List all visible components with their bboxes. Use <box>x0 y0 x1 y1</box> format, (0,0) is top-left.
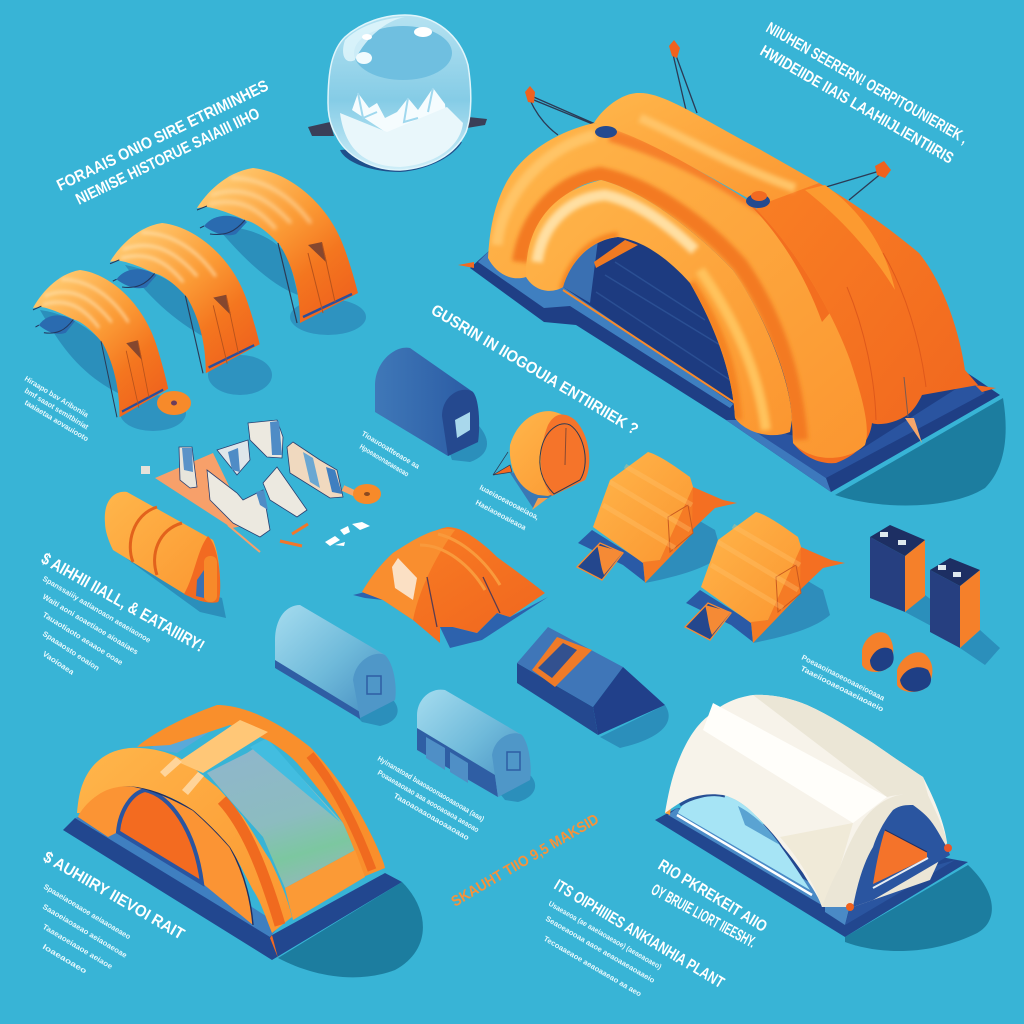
icon: light blue capsule A <box>275 605 398 726</box>
text: center heading: GUSRIN IN IIOGOUIA ENTIIRIIEK ? <box>428 302 641 439</box>
window <box>207 740 355 888</box>
tent rear body <box>755 183 978 463</box>
icon: centre orange dome tent <box>353 527 548 648</box>
arch module 2 <box>110 223 260 373</box>
front frame <box>77 748 292 933</box>
icon: navy tent with orange window <box>517 627 669 748</box>
text: cylinder heading and notes: Waiti aoni aoaetiaoe aioaaiaes <box>41 592 140 656</box>
text: upper left heading: FORAAIS ONIO SIRE ETRIMINHES <box>54 77 272 195</box>
text: left small block: taaiaetaa aovauiooto <box>23 398 91 444</box>
white inflatable tent <box>655 695 992 951</box>
text: bottom left heading and notes: Saaoeiaoaeao aeiaoaeoae <box>41 902 129 960</box>
arch module 3 <box>197 168 358 323</box>
rear ribs <box>847 253 926 420</box>
text: bottom centre heading and notes: Usaeaeoa (ae aaeiaoaeaoe) (aeaeaoaeo) <box>547 899 664 971</box>
three small orange arch modules <box>33 168 366 431</box>
icon: orange barrel pack <box>493 411 589 510</box>
text: cylinder heading and notes: Vaoioaea <box>41 649 77 677</box>
text: cylinder heading and notes: Spanssaiiiy aatianoaon aeaeiaonoe <box>41 574 152 645</box>
tent floor <box>470 200 1000 492</box>
icon: orange boxy tent A <box>577 452 737 583</box>
text: battery note: Poeaaoinaoeooaaeiooaaa <box>800 653 887 703</box>
ground shadow <box>845 865 992 951</box>
text: capsule note: Hpoeaoonaeaeaoao <box>358 442 411 479</box>
text: middle note: Poaaeaaoaao aaa aoooaoaoa aeaoao <box>376 768 481 834</box>
tent floor <box>655 808 968 937</box>
text: orange caption: SKAUHT TIIO 9,5 MAKSID <box>448 811 602 910</box>
loose parts <box>141 466 150 474</box>
icon: glass dome with mountains <box>308 15 487 172</box>
text: left small block <box>23 374 91 444</box>
kit parts <box>179 420 343 537</box>
orange valve ring <box>157 391 191 415</box>
text: lower right heading: OY BRUIE LIORT IIEESHY. <box>648 882 758 952</box>
roof strap <box>178 720 268 773</box>
orange ring <box>353 484 381 504</box>
canopy <box>665 695 947 907</box>
text: lower right heading: RIO PKREKEIT AIIO <box>655 857 770 936</box>
icon: navy capsule <box>375 348 487 462</box>
top ridge <box>594 93 819 205</box>
ground shadow <box>278 882 423 977</box>
icon: orange boxy tent B <box>685 512 845 643</box>
text: bottom left heading and notes: Spaaeiaoeaaoe aeiaaoaeaeo <box>42 882 133 941</box>
rear opening <box>150 723 223 753</box>
tent floor <box>63 818 402 960</box>
text: barrel note: Iuaeiaoeaooaeiaoa, <box>478 483 541 522</box>
icon: inflation gear kit <box>141 420 381 552</box>
rear frame <box>137 705 385 877</box>
left foot <box>665 790 673 815</box>
front panel <box>78 786 253 925</box>
tent anchors <box>525 86 535 103</box>
outer arch tube <box>488 123 867 458</box>
text: cylinder heading and notes: Tauaotiaoto aeaaoe ooae <box>41 610 125 667</box>
interior <box>563 237 735 405</box>
door <box>118 790 202 883</box>
valve knobs <box>595 126 617 138</box>
text: left small block: bmf saaot semitbiniat <box>23 386 91 432</box>
text: upper right heading: HWIDEIIDE IIAIS LAAHIIJLIENTIIRIS <box>757 43 956 168</box>
text: bottom left heading and notes: Taaeaoeiaaoe aeiaoe <box>41 922 114 971</box>
arch shadows <box>40 310 122 395</box>
inner arch tube <box>526 180 792 435</box>
text: battery note: Taaeiiooaeoaaeiaoaeio <box>799 664 886 714</box>
end face <box>822 793 947 907</box>
icon: batteries <box>870 525 1000 665</box>
door <box>873 830 927 884</box>
text: bottom centre heading and notes <box>542 877 727 999</box>
arch module 1 <box>33 270 168 417</box>
lit panel <box>805 185 895 290</box>
text: middle note: Taaoaoaaoaaoaaoaao <box>392 791 471 842</box>
big orange inflatable tent <box>458 40 1006 505</box>
ground shadow <box>835 398 1006 505</box>
text: upper left heading: NIEMISE HISTORUE SAIAIII IIHO <box>73 105 263 209</box>
icon: light blue capsule B <box>417 690 535 802</box>
text: capsule note: Tioauooatteeaoe aa <box>360 429 422 471</box>
text: cylinder heading and notes: $ AIHHII IIALL, & EATAIIIRY! <box>38 549 208 656</box>
text: cylinder heading and notes: Spaaaosto eoaion <box>41 629 102 673</box>
text: bottom centre heading and notes: Seaoeaooaa aaoe aeaoaaeaoaaeio <box>544 914 657 985</box>
text: bottom centre heading and notes: Tecoaaeaoe aeaoaaeao aa aeo <box>542 934 644 999</box>
text: left small block: Hiraapo bav Ariboniia <box>23 374 91 420</box>
window <box>678 795 810 890</box>
text: upper right heading <box>757 20 971 168</box>
guy lines <box>529 50 883 200</box>
icon: orange shoes <box>862 632 932 692</box>
lower right wall <box>285 850 365 920</box>
corner pegs <box>270 935 278 958</box>
text: bottom left heading and notes: Ioaeaoaeo <box>41 942 89 976</box>
kit mat <box>155 453 248 528</box>
text: bottom centre heading and notes: ITS OIPHIIIES ANKIANHIA PLANT <box>551 877 727 992</box>
text: middle note: Hyinanatoad baaoaoonaooaaooaa (aaa) <box>376 754 486 823</box>
icon: rolled orange cylinder <box>105 492 226 618</box>
bottom left orange and glass tent <box>63 705 423 977</box>
text: bottom left heading and notes: $ AUHIIRY IIEVOI RAIT <box>40 849 187 944</box>
text: barrel note: Haeiaoeoaieaoa <box>474 498 528 532</box>
